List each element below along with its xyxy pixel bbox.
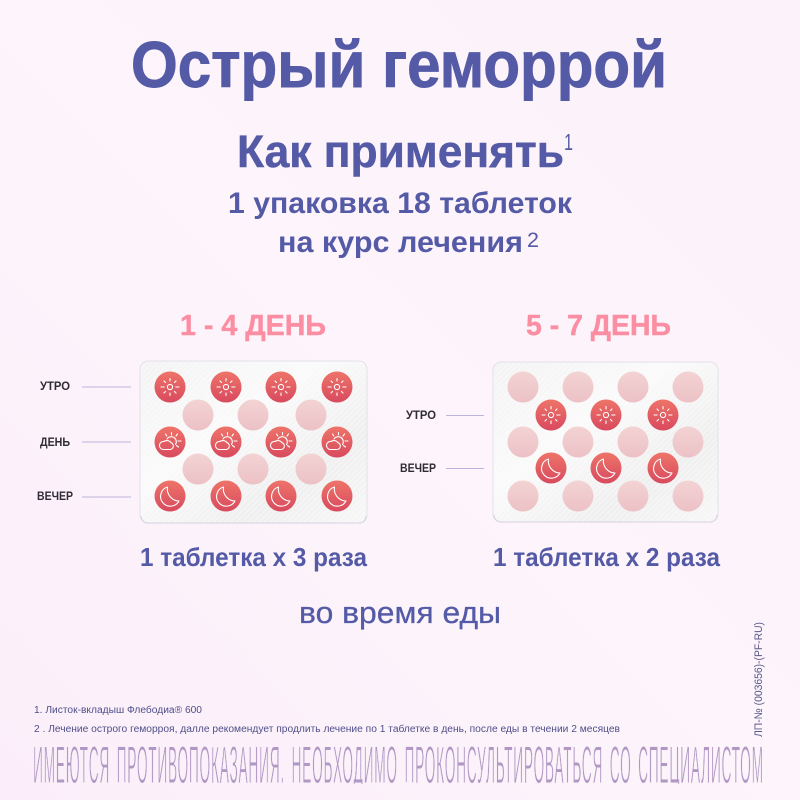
time labels: right blister: УТРО xyxy=(406,410,436,422)
subheading: package xyxy=(228,187,573,259)
time labels: left blister: ВЕЧЕР xyxy=(37,491,73,503)
heading: day 1-4: 1 - 4 ДЕНЬ xyxy=(180,310,326,342)
heading: day 5-7: 5 - 7 ДЕНЬ xyxy=(526,310,671,342)
registration number: ЛП-№ (003656)-(PF-RU) xyxy=(753,622,765,737)
footnote 2: 2 . Лечение острого геморроя, далле рекомендует продлить лечение по 1 таблетке в день, после еды в течении 2 месяцев xyxy=(34,723,620,735)
subheading: package: 1 упаковка 18 таблеток xyxy=(228,187,573,220)
subheading: package: 2 xyxy=(527,229,539,252)
time labels: left blister xyxy=(37,381,131,503)
blister: 5-7 day xyxy=(493,362,718,522)
warning: ИМЕЮТСЯ ПРОТИВОПОКАЗАНИЯ. НЕОБХОДИМО ПРОКОНСУЛЬТИРОВАТЬСЯ СО СПЕЦИАЛИСТОМ xyxy=(33,736,763,795)
blister: 1-4 day xyxy=(140,361,367,523)
time labels: left blister: ДЕНЬ xyxy=(40,437,70,449)
title: Острый геморрой xyxy=(131,28,667,101)
subheading: package: на курс лечения xyxy=(278,226,523,259)
heading: how to use: 1 xyxy=(564,129,573,155)
with meals note: во время еды xyxy=(299,595,501,630)
time labels: right blister xyxy=(400,410,484,475)
dosage: 3 times: 1 таблетка х 3 раза xyxy=(140,542,368,572)
time labels: right blister: ВЕЧЕР xyxy=(400,463,436,475)
time labels: left blister: УТРО xyxy=(40,381,70,393)
dosage: 2 times: 1 таблетка х 2 раза xyxy=(493,542,721,572)
heading: how to use: Как применять xyxy=(237,126,564,177)
footnote 1: 1. Листок-вкладыш Флебодиа® 600 xyxy=(34,704,202,716)
